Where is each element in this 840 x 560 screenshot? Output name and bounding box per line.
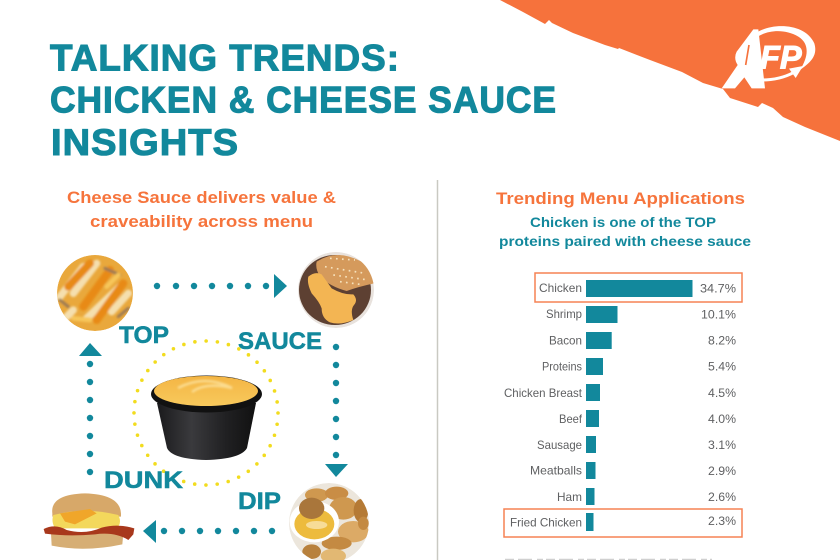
- label: sauce: SAUCE: [238, 328, 322, 355]
- row: proteins: 5.4%: [708, 360, 736, 374]
- label: dunk: DUNK: [104, 467, 184, 494]
- row: shrimp: Shrimp: [546, 307, 582, 321]
- icon: cheeseburger photo: [298, 252, 374, 328]
- label: top: TOP: [119, 322, 169, 349]
- row: ham: 2.6%: [708, 490, 736, 504]
- arrow: top to sauce: [154, 274, 287, 298]
- right panel heading: Trending Menu Applications: [496, 189, 745, 208]
- AFP logo: [722, 26, 815, 88]
- arrow: dip to dunk: [143, 520, 275, 543]
- row: sausage: Sausage: [537, 438, 582, 452]
- row: chicken breast: 4.5%: [708, 386, 736, 400]
- row: shrimp: [546, 306, 736, 323]
- icon: loaded fries photo: [57, 255, 133, 331]
- row: sausage: [537, 436, 736, 453]
- row: chicken: 34.7%: [700, 282, 736, 296]
- row: beef: Beef: [559, 412, 583, 426]
- title: CHICKEN & CHEESE SAUCE: [50, 80, 557, 120]
- panel: usage cycle diagram: [44, 252, 374, 560]
- row: ham: Ham: [557, 490, 582, 504]
- title: TALKING TRENDS:: [50, 38, 400, 78]
- arrow: sauce to dip: [325, 344, 348, 477]
- row: shrimp: 10.1%: [701, 308, 736, 322]
- row: bacon: 8.2%: [708, 334, 736, 348]
- left panel heading: [67, 188, 336, 231]
- arrow: dunk to top: [79, 343, 102, 475]
- right panel subheading: proteins paired with cheese sauce: [499, 233, 751, 249]
- row: bacon: [549, 332, 736, 349]
- orange torn corner banner: [500, 0, 840, 141]
- row: beef: 4.0%: [708, 412, 736, 426]
- row: fried chicken: [510, 513, 736, 531]
- row: chicken: Chicken: [539, 281, 582, 295]
- left panel heading: craveability across menu: [90, 212, 313, 231]
- left panel heading: Cheese Sauce delivers value &: [67, 188, 336, 207]
- row: proteins: [542, 358, 736, 375]
- row: sausage: 3.1%: [708, 438, 736, 452]
- highlight box: chicken: [535, 273, 742, 302]
- row: fried chicken: Fried Chicken: [510, 516, 582, 530]
- row: fried chicken: 2.3%: [708, 514, 736, 528]
- bar chart: proteins paired with cheese sauce: [504, 273, 742, 537]
- highlight box: fried chicken: [504, 509, 742, 537]
- right panel subheading: [499, 214, 751, 249]
- label: dip: DIP: [238, 488, 281, 515]
- row: meatballs: 2.9%: [708, 464, 736, 478]
- row: meatballs: Meatballs: [530, 464, 582, 478]
- icon: nuggets with dip photo: [289, 483, 369, 560]
- row: ham: [557, 488, 736, 505]
- right panel subheading: Chicken is one of the TOP: [530, 214, 716, 230]
- icon: breakfast biscuit sandwich photo: [44, 493, 134, 549]
- title: [50, 38, 557, 163]
- panel divider: [436, 180, 438, 560]
- row: chicken: [539, 280, 736, 297]
- row: beef: [559, 410, 736, 427]
- row: chicken breast: Chicken Breast: [504, 386, 583, 400]
- source line, cropped at page edge and unreadable in the reference: [505, 558, 712, 560]
- icon: cheese sauce cup: [151, 376, 262, 460]
- row: chicken breast: [504, 384, 736, 401]
- row: proteins: Proteins: [542, 360, 582, 374]
- yellow dotted ring: [134, 341, 278, 485]
- AFP logo: FP: [760, 39, 802, 75]
- row: meatballs: [530, 462, 736, 479]
- row: bacon: Bacon: [549, 334, 582, 348]
- title: INSIGHTS: [51, 122, 239, 163]
